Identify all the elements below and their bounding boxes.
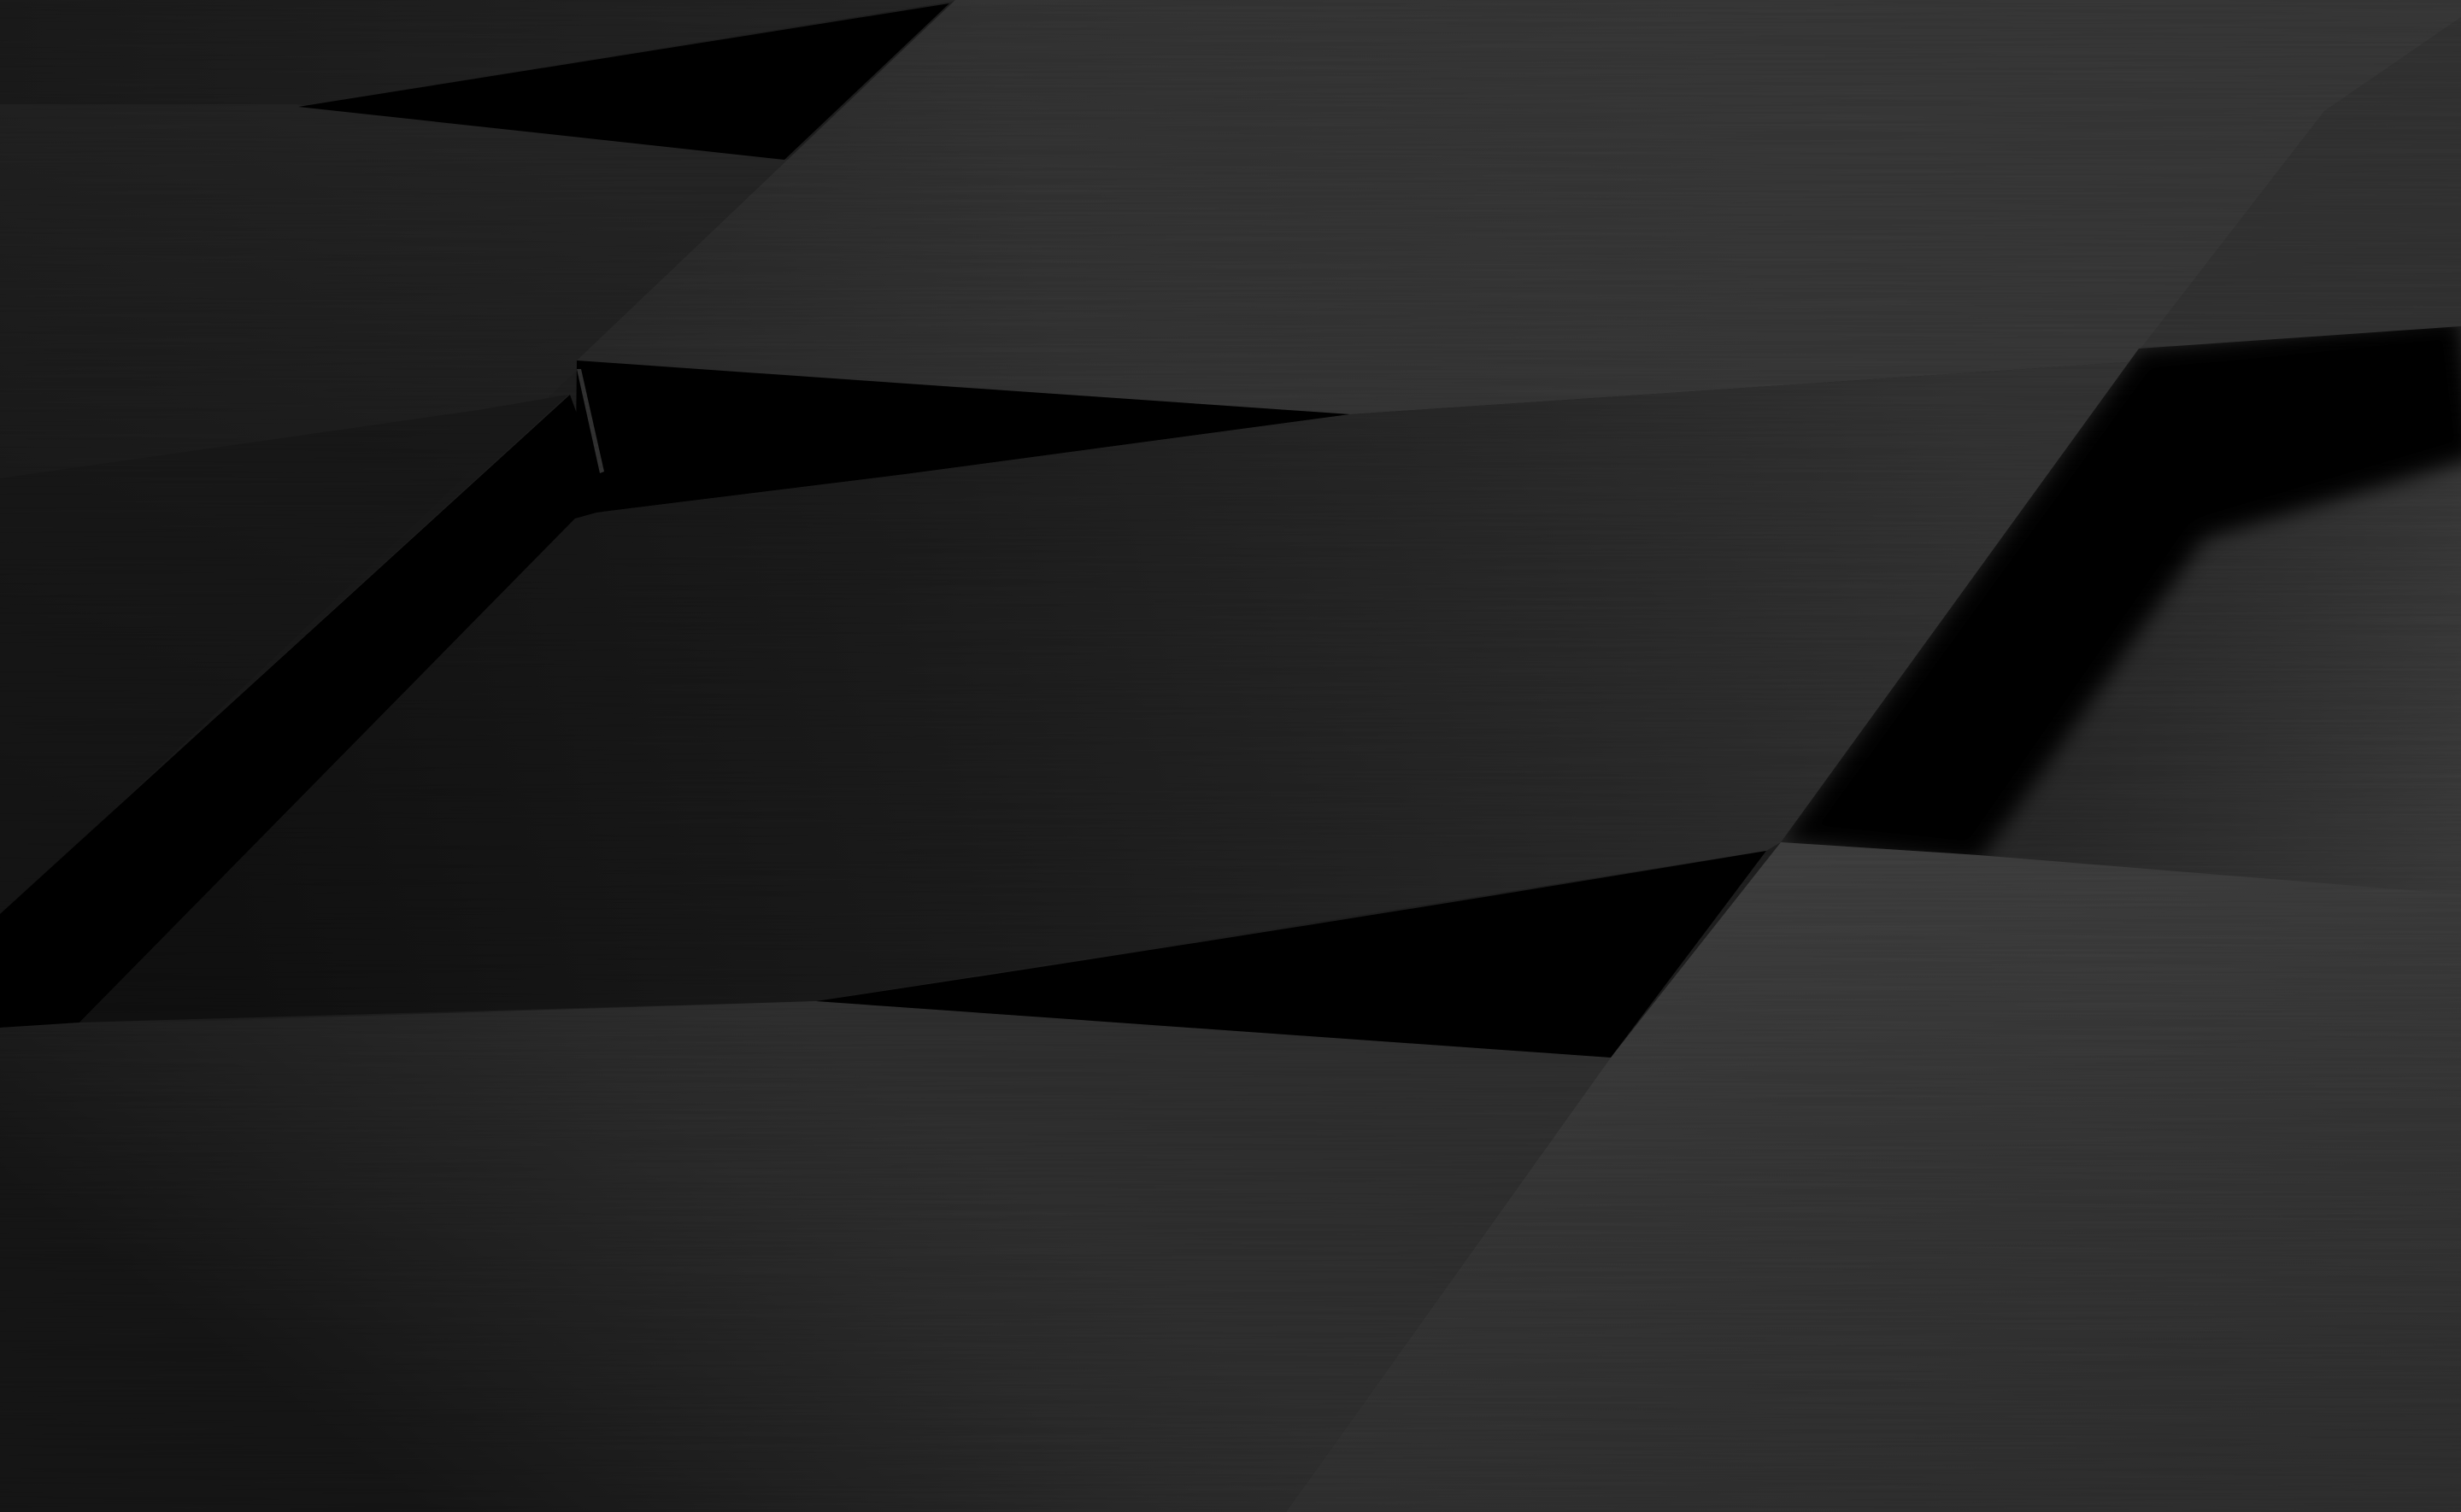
panel: right (1784, 326, 2461, 894)
panel: top left (0, 0, 961, 107)
panel: top right (2141, 17, 2461, 349)
panel: crease on left panel (0, 395, 568, 914)
shape: central black wedge (575, 360, 1350, 519)
shape: grey fold sliver (577, 369, 604, 473)
panel: left (0, 104, 855, 918)
shape: left black channel (0, 395, 602, 1028)
shape: right black shadow channel (1781, 316, 2461, 863)
panel: bottom right (1286, 842, 2461, 1512)
panel: center (79, 361, 2139, 1023)
shape: top black triangle (298, 3, 949, 160)
shape: bottom black triangle (816, 851, 1766, 1058)
panel: bottom left (0, 1001, 1611, 1512)
panel: top center (577, 0, 2461, 414)
